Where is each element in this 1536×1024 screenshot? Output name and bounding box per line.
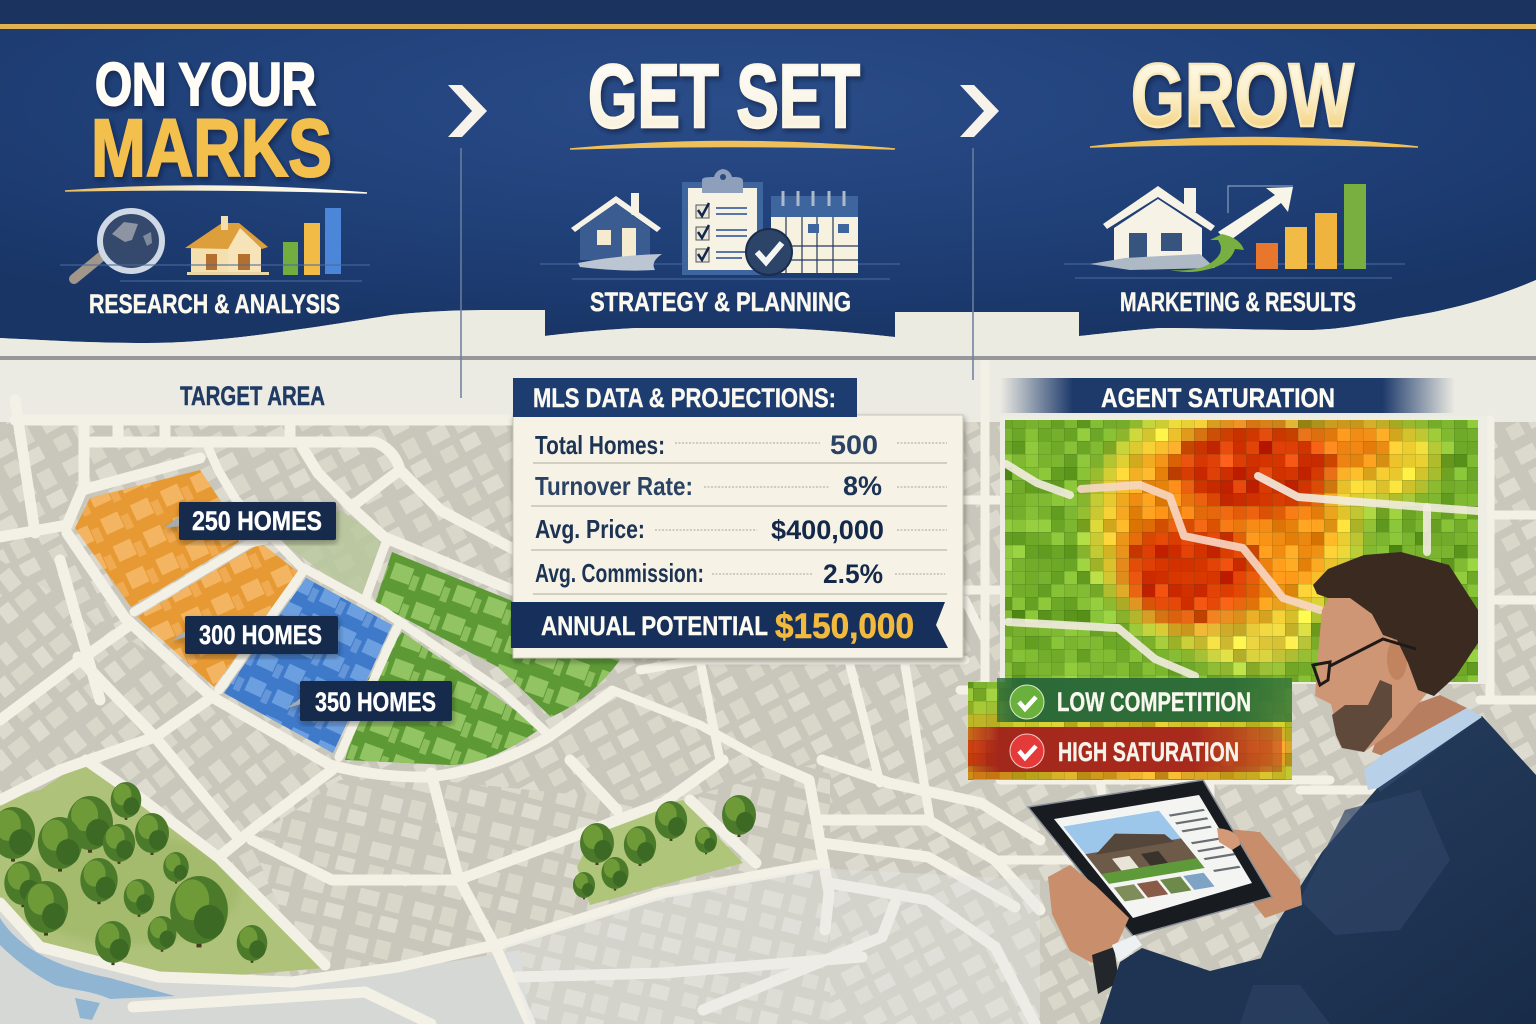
swoosh underline xyxy=(65,186,367,193)
head xyxy=(1315,592,1430,752)
tablet xyxy=(1028,780,1272,936)
lower fade xyxy=(504,868,1040,1024)
icon: house xyxy=(571,193,662,271)
row: total homes: Total Homes: xyxy=(535,430,665,460)
panel paper xyxy=(513,415,963,658)
icon: bar chart xyxy=(283,208,341,275)
row: avg commission xyxy=(535,558,883,589)
annual potential banner xyxy=(511,602,948,648)
callout: 350 homes: 350 HOMES xyxy=(315,687,436,717)
park: lower left xyxy=(0,760,325,975)
annual potential banner: $150,000 xyxy=(775,607,914,646)
heading: on your marks xyxy=(91,51,332,194)
far hand xyxy=(1217,828,1302,918)
hair xyxy=(1313,552,1478,696)
heading: grow: GROW xyxy=(1131,46,1354,146)
zone: orange 250 homes xyxy=(75,470,239,607)
park: centre xyxy=(577,800,743,905)
icon: check badge xyxy=(746,229,792,275)
row: turnover rate xyxy=(535,471,882,501)
icon: red check xyxy=(1010,734,1044,768)
jacket body xyxy=(1100,716,1536,1024)
figure: agent with tablet xyxy=(1028,552,1536,1024)
zone: blue 350 homes xyxy=(224,578,392,753)
heat map: agent saturation xyxy=(968,378,1486,780)
panel: mls data and projections xyxy=(511,378,963,658)
icon: calendar xyxy=(771,191,858,273)
legend: high saturation: HIGH SATURATION xyxy=(1058,737,1239,767)
row: turnover rate: 8% xyxy=(843,471,882,501)
icon: bar chart xyxy=(1256,184,1366,269)
icon: magnifying glass xyxy=(74,211,162,279)
street network xyxy=(0,360,1536,1024)
callout: 300 homes xyxy=(171,616,338,654)
icon: green check xyxy=(1010,685,1044,719)
zone: green lower xyxy=(345,632,541,765)
map background xyxy=(0,340,1536,1024)
legend: low competition xyxy=(997,678,1292,722)
jacket sleeve xyxy=(1100,948,1262,1024)
icon: house xyxy=(1090,186,1215,270)
caption: strategy and planning: STRATEGY & PLANNING xyxy=(590,287,851,317)
cream paper strip under header xyxy=(0,280,1536,356)
tablet screen content xyxy=(1063,808,1240,902)
icon: house xyxy=(185,216,269,275)
annual potential banner: ANNUAL POTENTIAL xyxy=(541,611,768,641)
row: avg price xyxy=(535,514,884,545)
park trees: lower left xyxy=(0,782,267,965)
callout: 250 homes xyxy=(164,502,336,540)
column 3: grow xyxy=(1064,46,1418,317)
icon: clipboard checklist xyxy=(682,169,763,275)
header band xyxy=(0,0,1536,360)
icon: growth arrow xyxy=(1170,186,1293,272)
near hand xyxy=(1048,865,1129,963)
caption: marketing and results: MARKETING & RESULTS xyxy=(1120,287,1356,317)
caption: research and analysis: RESEARCH & ANALYSIS xyxy=(89,289,340,319)
panel header tab xyxy=(513,378,857,417)
callout: 250 homes: 250 HOMES xyxy=(192,506,322,536)
row: avg price: $400,000 xyxy=(771,515,884,545)
thumb on tablet edge xyxy=(1217,828,1240,850)
swoosh underline xyxy=(1090,138,1418,147)
water and lower-left pale land xyxy=(0,905,530,1024)
zone: green upper xyxy=(375,552,620,717)
heat map roads xyxy=(1006,464,1478,676)
coloured target zones xyxy=(75,470,620,765)
callout: 350 homes xyxy=(287,681,452,721)
legend: low competition: LOW COMPETITION xyxy=(1057,687,1251,717)
glasses xyxy=(1313,639,1416,685)
row: turnover rate: Turnover Rate: xyxy=(535,471,693,501)
column 2: get set xyxy=(540,47,900,317)
heading: agent saturation: AGENT SATURATION xyxy=(1101,383,1335,413)
column 1: on your marks xyxy=(60,51,370,319)
swoosh underline xyxy=(570,142,895,149)
legend: high saturation xyxy=(968,727,1282,772)
chevron arrows and step dividers xyxy=(448,85,999,398)
heading: on your marks: ON YOUR xyxy=(95,51,316,118)
heading: on your marks: MARKS xyxy=(91,103,332,194)
shirt collar xyxy=(1364,708,1482,790)
zone: orange 300 homes xyxy=(137,543,298,687)
heading: target area: TARGET AREA xyxy=(180,381,325,411)
heading: agent saturation xyxy=(1000,378,1455,413)
watch xyxy=(1092,935,1142,994)
callout: 300 homes: 300 HOMES xyxy=(199,620,322,650)
park trees: centre xyxy=(573,795,756,899)
row: avg commission: Avg. Commission: xyxy=(535,558,704,588)
panel header tab: MLS DATA & PROJECTIONS: xyxy=(533,383,836,413)
row: avg commission: 2.5% xyxy=(823,559,883,589)
heading: get set: GET SET xyxy=(588,47,860,147)
row: avg price: Avg. Price: xyxy=(535,514,645,544)
neck xyxy=(1372,695,1467,756)
zone: pale green block xyxy=(282,510,385,603)
row: total homes xyxy=(535,430,878,460)
row: total homes: 500 xyxy=(830,430,878,460)
